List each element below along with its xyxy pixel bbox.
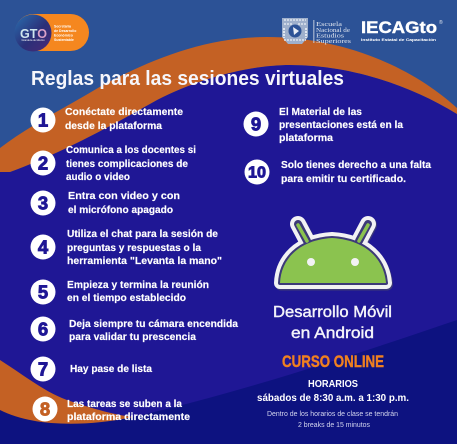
logo: UNAM ENES: Superiores — [316, 38, 352, 45]
schedule: sábados de 8:30 a.m. a 1:30 p.m. — [257, 393, 409, 404]
logo: GTO Secretaría de Desarrollo: GTO — [20, 26, 47, 41]
rule 1 — [30, 107, 183, 132]
rule 3 — [30, 190, 180, 216]
title: Reglas para las sesiones virtuales — [31, 68, 344, 90]
rule 8: plataforma directamente — [67, 412, 190, 423]
rule 1: 1 — [38, 110, 48, 130]
rule 6 — [30, 316, 238, 343]
logo: UNAM ENES: Nacional de — [316, 27, 350, 34]
rule 4: 4 — [38, 236, 49, 258]
rule 2: 2 — [38, 152, 48, 174]
rule 1: desde la plataforma — [65, 121, 162, 132]
icon: android — [280, 224, 387, 284]
course title: Desarrollo Móvil — [273, 304, 392, 321]
rule 4 — [30, 229, 222, 267]
rule 7: 7 — [38, 358, 48, 380]
rule 5: en el tiempo establecido — [67, 293, 186, 304]
rule 5: 5 — [38, 282, 48, 302]
rule 6: para validar tu prescencia — [69, 332, 196, 343]
rule 4: preguntas y respuestas o la — [67, 243, 201, 254]
rule 2: audio o video — [66, 172, 130, 183]
rule 10: Solo tienes derecho a una falta — [281, 160, 431, 171]
rule 3: el micrófono apagado — [68, 205, 173, 216]
schedule — [257, 379, 409, 404]
logo: UNAM ENES: Estudios — [316, 32, 345, 40]
rule 10: 10 — [248, 164, 266, 182]
logo: IECAGto: Instituto Estatal de Capacitación — [361, 38, 437, 42]
rule 6: 6 — [38, 318, 48, 340]
rule 9 — [244, 107, 403, 144]
schedule: HORARIOS — [308, 379, 358, 390]
breaks note: 2 breaks de 15 minutos — [298, 422, 370, 429]
rule 7: Hay pase de lista — [70, 364, 152, 375]
rule 1: Conéctate directamente — [65, 107, 183, 118]
breaks note — [267, 411, 398, 429]
course title — [273, 304, 392, 342]
course title: en Android — [291, 325, 374, 342]
rule 8: 8 — [40, 398, 50, 420]
logo: IECAGto: IECAGto — [361, 19, 437, 37]
logo: GTO Secretaría de Desarrollo — [14, 14, 89, 52]
rule 4: herramienta "Levanta la mano" — [67, 256, 222, 267]
logo: GTO Secretaría de Desarrollo: Secretaría — [54, 24, 71, 28]
rule 3: 3 — [38, 192, 48, 214]
rule 7 — [30, 356, 152, 382]
breaks note: Dentro de los horarios de clase se tendrán — [267, 411, 398, 418]
logo: GTO Secretaría de Desarrollo: Económico — [54, 34, 73, 38]
logo: GTO Secretaría de Desarrollo: Sustentable — [54, 38, 74, 42]
rule 10 — [244, 160, 431, 185]
logo: IECAGto: ® — [439, 19, 443, 26]
rule 2 — [30, 145, 196, 183]
rule 8 — [32, 396, 190, 423]
rule 4: Utiliza el chat para la sesión de — [67, 229, 218, 240]
rule 3: Entra con video y con — [68, 191, 180, 202]
logo: GTO Secretaría de Desarrollo: de Desarrollo — [54, 29, 76, 33]
logo: GTO Secretaría de Desarrollo: Grandeza de México — [21, 39, 45, 42]
rule 9: El Material de las — [279, 107, 362, 118]
rule 2: Comunica a los docentes si — [66, 145, 196, 156]
logo: IECAGto — [361, 19, 443, 42]
rule 8: Las tareas se suben a la — [67, 399, 182, 410]
rule 9: plataforma — [279, 133, 333, 144]
logo: UNAM ENES — [282, 18, 352, 45]
logo: UNAM ENES: Escuela — [316, 21, 342, 28]
rule 9: 9 — [251, 114, 261, 134]
course online label: CURSO ONLINE — [282, 352, 384, 371]
rule 5: Empieza y termina la reunión — [67, 280, 209, 291]
rule 5 — [30, 280, 209, 304]
rule 6: Deja siempre tu cámara encendida — [69, 319, 238, 330]
rule 9: presentaciones está en la — [279, 120, 403, 131]
rule 10: para emitir tu certificado. — [281, 174, 406, 185]
rule 2: tienes complicaciones de — [66, 159, 188, 170]
